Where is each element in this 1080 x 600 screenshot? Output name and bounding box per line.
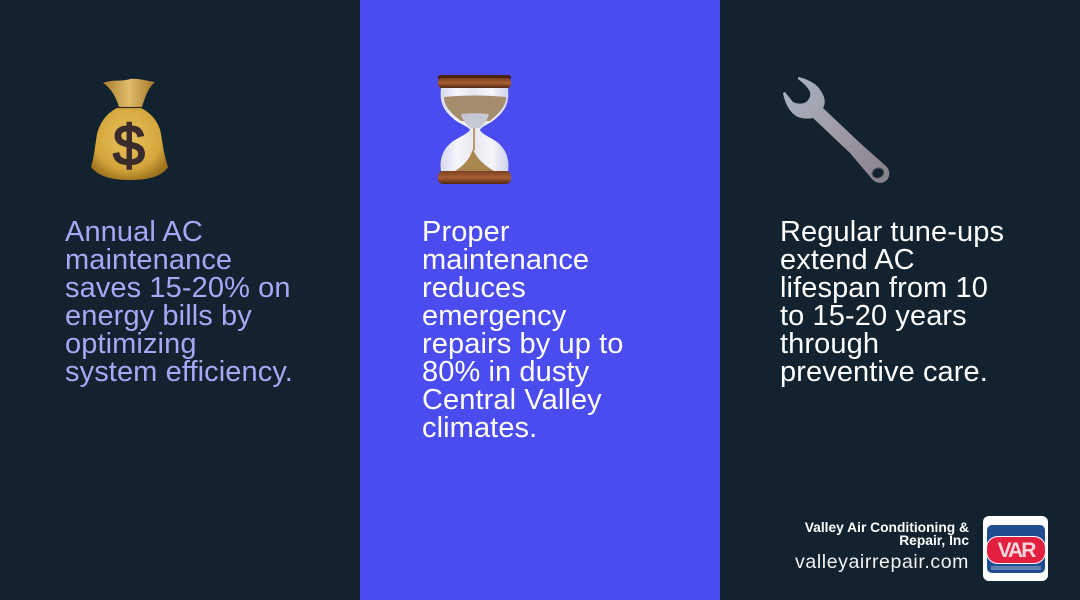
footer: company name and url: [795, 520, 969, 573]
text: fewer repairs: reduces: [422, 272, 526, 304]
company name: Valley Air Conditioning &: [805, 520, 969, 535]
text: fewer repairs: maintenance: [422, 244, 589, 276]
text: energy savings: energy bills by: [65, 300, 252, 332]
company name: [804, 520, 969, 548]
text: longer lifespan: to 15-20 years: [780, 300, 967, 332]
text: fewer repairs: repairs by up to: [422, 328, 624, 360]
text: longer lifespan: [780, 216, 1004, 388]
icon: hourglass: [438, 75, 511, 184]
text: fewer repairs: [422, 216, 624, 444]
company name: Repair, Inc: [899, 533, 969, 548]
text: fewer repairs: 80% in dusty: [422, 356, 589, 388]
panel: longer lifespan: [720, 0, 1080, 600]
text: fewer repairs: Central Valley: [422, 384, 602, 416]
text: fewer repairs: emergency: [422, 300, 566, 332]
text: fewer repairs: climates.: [422, 412, 537, 444]
logo wordmark: VAR: [998, 539, 1036, 562]
icon: money bag: [91, 78, 168, 180]
text: longer lifespan: Regular tune-ups: [780, 216, 1004, 248]
logo: VAR badge: [983, 516, 1048, 581]
text: energy savings: Annual AC: [65, 216, 203, 248]
text: energy savings: maintenance: [65, 244, 232, 276]
text: longer lifespan: through: [780, 328, 879, 360]
panel: fewer repairs: [360, 0, 720, 600]
icon: wrench: [783, 77, 890, 183]
dollar sign: $: [113, 114, 145, 178]
text: fewer repairs: Proper: [422, 216, 510, 248]
website url: valleyairrepair.com: [795, 551, 969, 573]
text: energy savings: optimizing: [65, 328, 197, 360]
text: energy savings: saves 15-20% on: [65, 272, 291, 304]
panel: energy savings: [0, 0, 360, 600]
text: longer lifespan: extend AC: [780, 244, 915, 276]
text: energy savings: system efficiency.: [65, 356, 293, 388]
text: longer lifespan: preventive care.: [780, 356, 988, 388]
text: energy savings: [65, 216, 293, 388]
text: longer lifespan: lifespan from 10: [780, 272, 988, 304]
